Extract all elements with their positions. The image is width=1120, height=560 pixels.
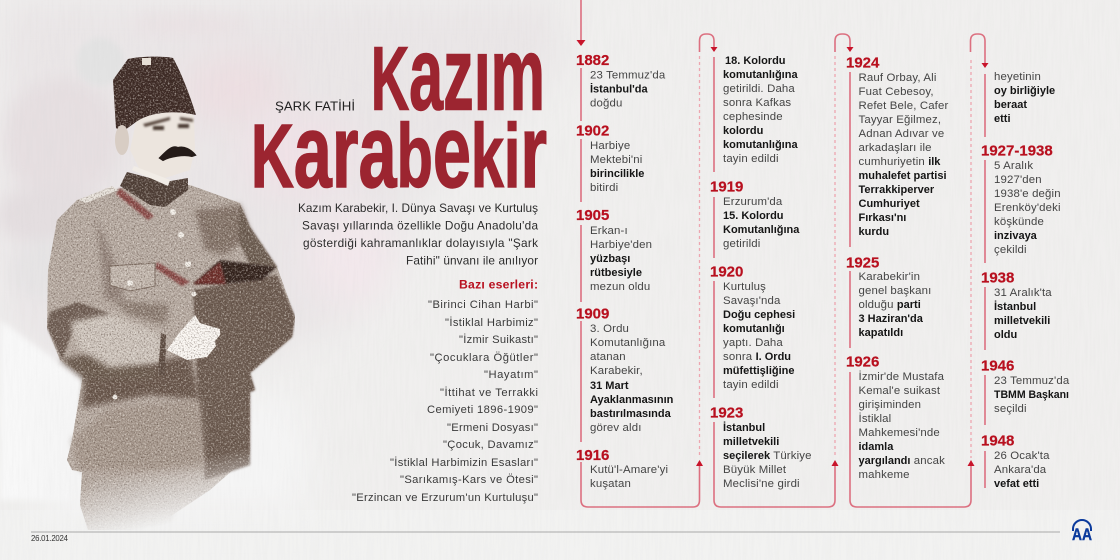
- timeline column 4: [981, 71, 1070, 490]
- 1905: [576, 207, 652, 293]
- 1938: 31 Aralık'ta: [994, 287, 1052, 299]
- timeline column 1: [576, 52, 674, 490]
- verdict (continued): oy birliğiyle: [994, 85, 1055, 97]
- shirt collar: [132, 166, 170, 186]
- list items: "Hayatım": [484, 369, 538, 381]
- list items: "Erzincan ve Erzurum'un Kurtuluşu": [352, 492, 538, 504]
- 1905: rütbesiyle: [590, 267, 642, 279]
- 1905: yüzbaşı: [590, 253, 630, 265]
- 1924: Adnan Adıvar ve: [858, 128, 944, 140]
- 1920: Doğu cephesi: [723, 309, 795, 321]
- 1938: İstanbul: [994, 300, 1036, 313]
- 18. Kolordu (continued): kolordu: [723, 125, 763, 137]
- 1909: Karabekir,: [590, 365, 643, 377]
- 1927-1938: Erenköy'deki: [994, 202, 1061, 214]
- 1926: idamla: [858, 441, 894, 453]
- 1924: 1924: [846, 54, 880, 72]
- 1948: 1948: [981, 432, 1014, 450]
- 1919: Komutanlığına: [723, 224, 800, 236]
- 1902: birincilikle: [590, 168, 644, 180]
- 1925: genel başkanı: [858, 285, 931, 297]
- 1925: 1925: [846, 254, 879, 272]
- 1938: oldu: [994, 329, 1017, 341]
- intro paragraph: Kazım Karabekir, I. Dünya Savaşı ve Kurtuluş: [298, 201, 538, 215]
- eyes and brows: [143, 117, 193, 127]
- 1920: [710, 264, 795, 391]
- jacket silhouette: [47, 185, 295, 530]
- name line 1: Kazım: [371, 16, 545, 132]
- list items: "Sarıkamış-Kars ve Ötesi": [400, 474, 538, 486]
- 18. Kolordu (continued): 18. Kolordu: [725, 55, 786, 67]
- 1925: [846, 254, 931, 339]
- portrait: Kazım Karabekir in uniform: [47, 57, 295, 530]
- ear: [115, 125, 129, 155]
- 1948: [981, 432, 1050, 490]
- list items: "İstiklal Harbimiz": [445, 316, 538, 329]
- icon: AA agency logo: AA: [1072, 525, 1092, 544]
- 1924: Rauf Orbay, Ali: [858, 72, 937, 84]
- 1938: 1938: [981, 270, 1014, 286]
- 1938: [981, 270, 1052, 341]
- 1924: Fuat Cebesoy,: [858, 86, 934, 98]
- list items: Cemiyeti 1896-1909": [427, 404, 538, 416]
- 1946: seçildi: [994, 403, 1027, 415]
- list items: "İttihat ve Terrakki: [440, 386, 538, 399]
- shoulder strap: [78, 186, 118, 203]
- 1920: komutanlığı: [723, 323, 785, 335]
- 1925: 3 Haziran'da: [858, 313, 924, 325]
- 1920: tayin edildi: [723, 379, 779, 391]
- list heading: Bazı eserleri:: [459, 278, 538, 292]
- belt: [193, 260, 277, 284]
- 1924: arkadaşları ile: [858, 142, 932, 154]
- 1926: mahkeme: [858, 469, 910, 481]
- 1882: 23 Temmuz'da: [590, 70, 666, 82]
- 1905: Harbiye'den: [590, 239, 652, 251]
- 1927-1938: çekildi: [994, 244, 1027, 256]
- 1909: 1909: [576, 306, 609, 322]
- verdict (continued): beraat: [994, 99, 1027, 111]
- intro paragraph: [298, 201, 538, 268]
- red stains: [116, 188, 190, 286]
- verdict (continued): heyetinin: [994, 71, 1041, 83]
- chest pocket: [110, 263, 155, 291]
- 1909: bastırılmasında: [590, 408, 672, 420]
- 1882: [576, 52, 666, 110]
- 1927-1938: 5 Aralık: [994, 160, 1033, 172]
- list items: "Çocuk, Davamız": [443, 439, 538, 451]
- 1902: [576, 122, 644, 194]
- title block: [251, 16, 547, 210]
- 1916: [576, 447, 668, 490]
- intro paragraph: gösterdiği kahramanlıklar dolayısıyla "Şark: [303, 236, 538, 250]
- footer rule: [31, 532, 1060, 533]
- 1920: Kurtuluş: [723, 281, 766, 293]
- 1927-1938: inzivaya: [994, 230, 1038, 242]
- 18. Kolordu (continued): cephesinde: [723, 111, 783, 123]
- 1924: muhalefet partisi: [858, 170, 947, 182]
- face: [130, 112, 195, 178]
- list items: "Birinci Cihan Harbi": [428, 299, 538, 311]
- list items: "İstiklal Harbimizin Esasları": [390, 456, 538, 469]
- 1925: Karabekir'in: [858, 271, 920, 283]
- 1926: [846, 354, 945, 481]
- 1923: İstanbul: [723, 421, 765, 434]
- 1919: 1919: [710, 178, 743, 196]
- 1920: 1920: [710, 264, 743, 280]
- list items: [352, 299, 538, 504]
- 1919: [710, 178, 800, 250]
- 1946: [981, 358, 1070, 415]
- 1948: Ankara'da: [994, 464, 1047, 476]
- 1946: TBMM Başkanı: [994, 389, 1069, 401]
- 1925: olduğu parti: [858, 299, 921, 311]
- 1923: milletvekili: [723, 436, 779, 448]
- hat badge: [142, 58, 151, 65]
- 1924: Tayyar Eğilmez,: [858, 114, 941, 126]
- 1926: Kemal'e suikast: [858, 385, 941, 397]
- 1927-1938: [981, 142, 1061, 256]
- 1923: [710, 404, 812, 490]
- verdict (continued): [994, 71, 1055, 125]
- 1882: 1882: [576, 52, 609, 69]
- 1882: doğdu: [590, 98, 622, 110]
- 1946: 1946: [981, 358, 1014, 374]
- 1905: mezun oldu: [590, 281, 650, 293]
- 1924: Fırkası'nı: [858, 212, 906, 224]
- 1927-1938: 1938'e değin: [994, 188, 1061, 200]
- 1926: İzmir'de Mustafa: [858, 370, 945, 383]
- 1902: bitirdi: [590, 182, 618, 194]
- hand: [167, 315, 220, 360]
- 1909: görev aldı: [590, 422, 642, 434]
- collar: [120, 172, 188, 207]
- 1938: milletvekili: [994, 315, 1050, 327]
- 1923: 1923: [710, 404, 743, 422]
- 1916: Kutü'l-Amare'yi: [590, 464, 668, 476]
- 1926: Mahkemesi'nde: [858, 427, 940, 439]
- 18. Kolordu (continued): getirildi. Daha: [723, 83, 795, 95]
- works list: [352, 278, 538, 504]
- 1909: 3. Ordu: [590, 323, 629, 335]
- 1920: sonra I. Ordu: [723, 351, 791, 363]
- 1923: seçilerek Türkiye: [723, 450, 812, 462]
- 1916: 1916: [576, 447, 609, 464]
- subtitle: ŞARK FATİHİ: [275, 100, 355, 114]
- date: 26.01.2024: [31, 534, 69, 543]
- 1926: 1926: [846, 354, 879, 370]
- verdict (continued): etti: [994, 113, 1010, 125]
- 1920: müfettişliğine: [723, 365, 795, 377]
- paper background: [0, 5, 550, 497]
- 1946: 23 Temmuz'da: [994, 375, 1070, 387]
- 1927-1938: 1927'den: [994, 174, 1042, 186]
- 1909: atanan: [590, 351, 626, 363]
- 1882: İstanbul'da: [590, 82, 649, 96]
- 1924: Refet Bele, Cafer: [858, 100, 948, 112]
- 1923: Büyük Millet: [723, 464, 787, 476]
- buttons: [112, 209, 196, 400]
- 18. Kolordu (continued): [723, 55, 798, 165]
- 1926: İstiklal: [858, 412, 891, 425]
- timeline connectors: [576, 0, 988, 507]
- 1909: [576, 306, 674, 434]
- 1927-1938: köşkünde: [994, 216, 1044, 228]
- 1923: Meclisi'ne girdi: [723, 478, 800, 490]
- 1920: yaptı. Daha: [723, 337, 783, 349]
- 1902: Mektebi'ni: [590, 154, 642, 166]
- 1902: 1902: [576, 122, 609, 140]
- list items: "Çocuklara Öğütler": [430, 352, 538, 364]
- 1948: 26 Ocak'ta: [994, 450, 1050, 462]
- 1919: getirildi: [723, 238, 760, 250]
- 1909: Ayaklanmasının: [590, 394, 674, 406]
- name line 2: Karabekir: [251, 94, 547, 210]
- 1925: kapatıldı: [858, 327, 903, 339]
- list items: "Ermeni Dosyası": [447, 422, 538, 434]
- hat: [113, 57, 196, 132]
- intro paragraph: Savaşı yıllarında özellikle Doğu Anadolu'da: [302, 218, 538, 232]
- icon: AA agency logo: [1072, 520, 1092, 544]
- 1905: 1905: [576, 207, 609, 224]
- 18. Kolordu (continued): sonra Kafkas: [723, 97, 791, 109]
- 1948: vefat etti: [994, 478, 1039, 490]
- 1926: girişiminden: [858, 399, 921, 411]
- timeline column 2: [710, 55, 812, 490]
- cuff: [158, 333, 166, 375]
- 1919: 15. Kolordu: [723, 210, 784, 222]
- intro paragraph: Fatihi" ünvanı ile anılıyor: [406, 254, 538, 268]
- 1924: [846, 54, 948, 238]
- 1924: Cumhuriyet: [858, 198, 920, 210]
- 1924: kurdu: [858, 226, 889, 238]
- 18. Kolordu (continued): tayin edildi: [723, 153, 779, 165]
- 18. Kolordu (continued): komutanlığına: [723, 69, 798, 81]
- 1905: Erkan-ı: [590, 225, 628, 237]
- 1926: yargılandı ancak: [858, 455, 945, 467]
- 1909: Komutanlığına: [590, 337, 666, 349]
- moustache: [160, 147, 195, 160]
- timeline column 3: [846, 54, 948, 481]
- jacket shading: [47, 205, 295, 530]
- 1920: Savaşı'nda: [723, 295, 781, 307]
- head: [115, 58, 195, 186]
- 18. Kolordu (continued): komutanlığına: [723, 139, 798, 151]
- 1924: Terrakkiperver: [858, 184, 935, 196]
- 1909: 31 Mart: [590, 380, 629, 392]
- 1916: kuşatan: [590, 478, 631, 490]
- 1924: cumhuriyetin ilk: [858, 156, 941, 168]
- 1927-1938: 1927-1938: [981, 142, 1053, 160]
- 1919: Erzurum'da: [723, 196, 783, 208]
- list items: "İzmir Suikastı": [459, 333, 538, 346]
- 1902: Harbiye: [590, 140, 630, 152]
